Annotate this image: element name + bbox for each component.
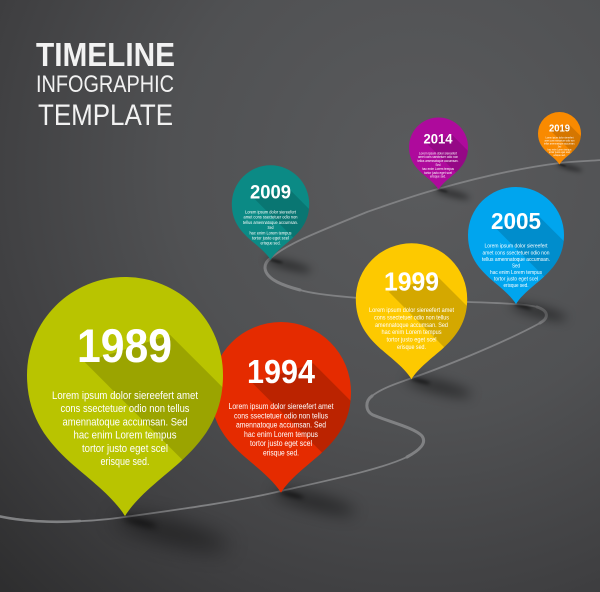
long shadow [252, 363, 350, 452]
long shadow [496, 216, 564, 276]
description: hac enim Lorem tempus [244, 430, 318, 439]
long shadow [427, 135, 468, 172]
description: tellus amennatoque accumsan. [418, 159, 459, 163]
description [369, 307, 454, 351]
description: tortor justo eget scel [386, 337, 436, 344]
description: hac enim Lorem tempus [74, 430, 177, 442]
long shadow [552, 124, 581, 152]
description: amennatoque accumsan. Sed [236, 421, 326, 430]
description: hac enim Lorem tempus [548, 148, 572, 151]
description: amet cons ssectetuer odio non [418, 155, 458, 159]
description [544, 137, 575, 157]
description: Lorem ipsum dolor siereefert [419, 151, 457, 155]
description: Sed [558, 145, 562, 148]
description: tortor justo eget scel [250, 439, 312, 448]
description: tortor justo eget scel [252, 236, 289, 240]
pin: 2005 [468, 187, 564, 304]
description: Lorem ipsum dolor siereefert amet [52, 390, 199, 402]
pin: 2009 [232, 165, 310, 260]
pin body [468, 187, 564, 304]
description: Lorem ipsum dolor siereefert [245, 210, 297, 214]
description: tellus amennatoque accumsan. [243, 220, 298, 225]
description [228, 402, 334, 458]
description: hac enim Lorem tempus [490, 270, 542, 276]
description: tortor justo eget scel [494, 276, 538, 282]
description: amennatoque accumsan. Sed [62, 416, 188, 428]
long shadow [255, 188, 309, 238]
description: tellus amennatoque accumsan. [544, 142, 575, 146]
description: amet cons ssectetuer odio non [544, 140, 575, 143]
year: 2019 [549, 123, 570, 134]
description: hac enim Lorem tempus [422, 167, 454, 171]
year: 1989 [77, 319, 172, 372]
description: Lorem ipsum dolor siereefert [546, 137, 574, 140]
description [243, 210, 298, 246]
description: Lorem ipsum dolor siereefert amet [228, 402, 334, 411]
title [36, 36, 175, 132]
description: erisque sed. [554, 154, 566, 157]
pin body [409, 118, 468, 189]
year: 2009 [250, 183, 291, 204]
long shadow [388, 276, 467, 347]
year: 1994 [247, 353, 316, 390]
description: hac enim Lorem tempus [250, 230, 292, 235]
description: erisque sed. [397, 344, 426, 351]
description: hac enim Lorem tempus [382, 329, 442, 336]
title line: TIMELINE: TIMELINE [36, 36, 175, 73]
description [52, 390, 199, 468]
description: Sed [436, 163, 441, 167]
pin body [356, 243, 467, 379]
pin body [232, 165, 309, 260]
description: Lorem ipsum dolor siereefert [484, 244, 548, 250]
description [418, 151, 459, 179]
pin: 2014 [409, 118, 468, 190]
description: erisque sed. [260, 241, 280, 246]
description: erisque sed. [100, 456, 150, 468]
title line: INFOGRAPHIC: INFOGRAPHIC [36, 71, 174, 98]
pin: 1999 [356, 243, 468, 380]
description [482, 244, 550, 289]
description: cons ssectetuer odio non tellus [60, 403, 190, 415]
long shadow [85, 335, 222, 460]
description: tortor justo eget scel [82, 443, 168, 455]
year: 2014 [424, 130, 453, 146]
description: amennatoque accumsan. Sed [375, 322, 448, 329]
description: erisque sed. [430, 175, 446, 179]
description: tellus amennatoque accumsan. [482, 257, 550, 263]
year: 2005 [491, 208, 541, 234]
pin body [27, 277, 223, 516]
description: amet cons ssectetuer odio non [482, 250, 550, 256]
pin body [211, 322, 351, 493]
pin body [538, 112, 581, 164]
description: cons ssectetuer odio non tellus [374, 314, 449, 321]
description: cons ssectetuer odio non tellus [234, 411, 328, 420]
description: erisque sed. [263, 448, 299, 458]
timeline road [0, 160, 600, 522]
pin: 2019 [538, 112, 581, 164]
description: tortor justo eget scel [549, 151, 570, 154]
title line: TEMPLATE: TEMPLATE [38, 99, 173, 132]
description: amet cons ssectetuer odio non [244, 215, 298, 220]
description: Lorem ipsum dolor siereefert amet [369, 307, 454, 314]
pin: 1989 [27, 277, 223, 516]
pin: 1994 [214, 322, 351, 493]
ground shadows [112, 162, 583, 556]
description: Sed [268, 225, 274, 230]
description: tortor justo eget scel [424, 171, 452, 175]
year: 1999 [384, 267, 439, 297]
description: erisque sed. [504, 283, 529, 289]
description: Sed [512, 263, 520, 269]
